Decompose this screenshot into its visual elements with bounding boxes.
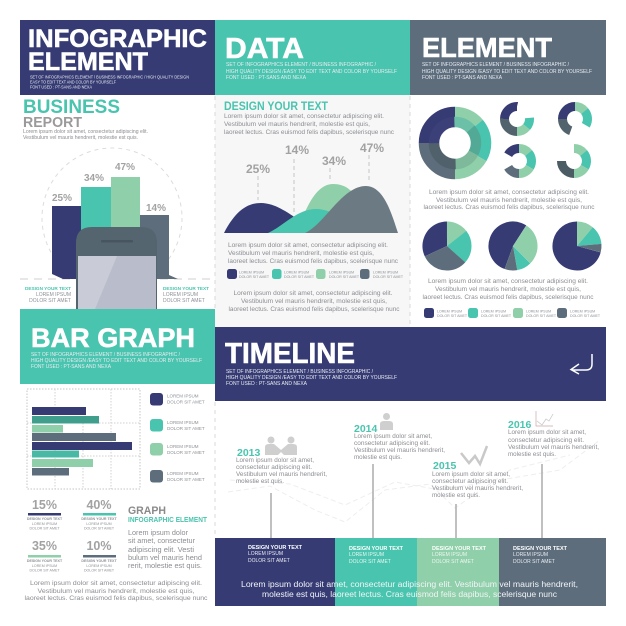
timeline bottom band: DESIGN YOUR TEXT xyxy=(432,546,487,552)
timeline 2016: consectetur adipiscing elit. xyxy=(508,437,584,444)
data text block xyxy=(228,242,399,265)
header: element: HIGH QUALITY DESIGN /EASY TO EDIT TEXT AND COLOR BY YOURSELF xyxy=(422,69,592,75)
data legend: LOREM IPSUM xyxy=(239,270,264,274)
percentage stats: DOLOR SIT AMET xyxy=(29,526,60,530)
timeline bottom band: DOLOR SIT AMET xyxy=(349,559,391,565)
bar graph closing text: Vestibulum vel mauris hendrerit, molestie est quis, xyxy=(38,588,195,595)
dashed panel dividers xyxy=(215,96,410,538)
icon: person xyxy=(380,413,393,430)
icon: smartphone xyxy=(76,227,157,309)
timeline 2013: consectetur adipiscing elit. xyxy=(236,464,312,471)
small donut 4 xyxy=(556,143,592,179)
bar graph closing text xyxy=(24,580,208,602)
large donut chart xyxy=(411,99,499,187)
timeline 2013: Lorem ipsum dolor sit amet, xyxy=(236,457,314,464)
timeline bottom band: DOLOR SIT AMET xyxy=(513,559,555,565)
header: timeline: TIMELINE xyxy=(225,338,355,370)
timeline 2015: consectetur adipiscing elit. xyxy=(432,478,508,485)
element legend: LOREM IPSUM xyxy=(437,310,462,314)
element legend xyxy=(424,308,601,318)
timeline 2016 xyxy=(508,411,599,458)
timeline connectors xyxy=(271,464,542,538)
left phone caption: DESIGN YOUR TEXT xyxy=(25,286,71,291)
area chart: 14% xyxy=(285,143,309,157)
data closing text xyxy=(228,290,400,313)
timeline 2013: 2013 xyxy=(237,447,261,459)
phone bar chart: 14% xyxy=(146,203,166,214)
percentage stats: 35% xyxy=(32,539,57,553)
percentage stats: 40% xyxy=(86,498,112,512)
header: element: ELEMENT xyxy=(422,32,552,63)
header: element: FONT USED : PT-SANS AND NEXA xyxy=(422,75,503,81)
percentage stats: DOLOR SIT AMET xyxy=(84,526,115,530)
element legend: DOLOR SIT AMET xyxy=(481,314,512,318)
right phone caption: DESIGN YOUR TEXT xyxy=(163,286,209,291)
element text block 2: Lorem ipsum dolor sit amet, consectetur adipiscing elit. xyxy=(428,278,588,285)
small donut 1 xyxy=(499,101,535,137)
timeline bottom band: DOLOR SIT AMET xyxy=(432,559,474,565)
data legend xyxy=(227,269,404,279)
element text block 2: laoreet lectus. Cras euismod felis dapibus, scelerisque nunc xyxy=(422,294,594,301)
element legend: LOREM IPSUM xyxy=(570,310,595,314)
pie chart 3 xyxy=(560,229,594,263)
element text block 1: Vestibulum vel mauris hendrerit, molestie est quis, xyxy=(436,197,582,204)
data text block: laoreet lectus. Cras euismod felis dapibus, scelerisque nunc xyxy=(228,258,399,265)
business report heading: Lorem ipsum dolor sit amet, consectetur adipiscing elit. xyxy=(23,129,148,135)
pie chart 2 xyxy=(496,229,530,263)
left phone caption xyxy=(25,286,71,304)
timeline 2014: molestie est quis. xyxy=(354,454,402,461)
header: timeline: HIGH QUALITY DESIGN /EASY TO EDIT TEXT AND COLOR BY YOURSELF xyxy=(226,375,397,381)
bar chart legend: LOREM IPSUM xyxy=(167,420,199,425)
element legend: DOLOR SIT AMET xyxy=(570,314,601,318)
header: data: FONT USED : PT-SANS AND NEXA xyxy=(226,75,307,81)
percentage stats: LOREM IPSUM xyxy=(86,564,112,568)
timeline bottom band: LOREM IPSUM xyxy=(349,552,384,558)
bar graph closing text: laoreet lectus. Cras euismod felis dapibus, scelerisque nunc xyxy=(24,595,208,602)
percentage stats: DESIGN YOUR TEXT xyxy=(27,517,63,521)
data legend: LOREM IPSUM xyxy=(284,270,309,274)
header: data: DATA xyxy=(225,33,304,65)
icon: line chart xyxy=(536,411,553,426)
business report heading: Vestibulum vel mauris hendrerit, molestie est quis. xyxy=(23,135,138,141)
right phone caption: DOLOR SIT AMET xyxy=(163,298,205,304)
header: bar graph: HIGH QUALITY DESIGN /EASY TO EDIT TEXT AND COLOR BY YOURSELF xyxy=(31,358,202,364)
percentage stats xyxy=(27,498,117,572)
bar chart legend: LOREM IPSUM xyxy=(167,394,199,398)
bar chart legend: DOLOR SIT AMET xyxy=(167,426,205,431)
timeline bottom band: DESIGN YOUR TEXT xyxy=(513,546,568,552)
percentage stats: LOREM IPSUM xyxy=(32,522,57,526)
timeline 2013: molestie est quis. xyxy=(236,478,284,485)
graph text block: INFOGRAPHIC ELEMENT xyxy=(128,515,207,524)
header: timeline: SET OF INFOGRAPHICS ELEMENT / BUSINESS INFOGRAPHIC / xyxy=(226,369,374,375)
timeline bottom band: LOREM IPSUM xyxy=(248,551,283,557)
header: infographic element: EASY TO EDIT TEXT AND COLOR BY YOURSELF xyxy=(30,80,116,84)
element text block 2: Vestibulum vel mauris hendrerit, molestie est quis, xyxy=(435,286,581,293)
header: element: SET OF INFOGRAPHICS ELEMENT / BUSINESS INFOGRAPHIC / xyxy=(422,62,570,68)
timeline 2014: Lorem ipsum dolor sit amet, xyxy=(354,433,432,440)
percentage stats: DOLOR SIT AMET xyxy=(29,568,60,572)
icon: handshake xyxy=(265,436,297,455)
graph text block: rerit, molestie est quis. xyxy=(128,563,202,570)
data legend: DOLOR SIT AMET xyxy=(329,275,360,279)
graph text block: bulum vel mauris hend xyxy=(128,555,202,562)
timeline bottom band: DOLOR SIT AMET xyxy=(248,558,290,564)
graph text block: adipiscing elit. Vesti xyxy=(128,547,194,554)
header: infographic element: ELEMENT xyxy=(28,48,148,76)
timeline 2015: molestie est quis. xyxy=(432,492,480,499)
bar chart legend: DOLOR SIT AMET xyxy=(167,477,205,482)
graph text block xyxy=(128,505,207,570)
phone bar chart: 47% xyxy=(115,162,135,173)
graph text block: Lorem ipsum dolor xyxy=(128,530,189,537)
element text block 1: Lorem ipsum dolor sit amet, consectetur adipiscing elit. xyxy=(429,189,589,196)
data heading and text xyxy=(224,101,395,136)
header: infographic element xyxy=(20,20,215,95)
header: data: HIGH QUALITY DESIGN /EASY TO EDIT TEXT AND COLOR BY YOURSELF xyxy=(226,69,397,75)
small donut 2 xyxy=(557,101,593,137)
header: infographic element: FONT USED : PT-SANS AND NEXA xyxy=(30,84,92,90)
data legend: DOLOR SIT AMET xyxy=(239,275,270,279)
timeline bottom band: DESIGN YOUR TEXT xyxy=(248,545,303,551)
timeline bottom band: LOREM IPSUM xyxy=(432,552,467,558)
timeline 2015: Lorem ipsum dolor sit amet, xyxy=(432,471,510,478)
bar chart legend: LOREM IPSUM xyxy=(167,471,199,476)
header: bar graph: BAR GRAPH xyxy=(31,323,195,353)
timeline 2016: Lorem ipsum dolor sit amet, xyxy=(508,429,586,436)
timeline 2014: Vestibulum vel mauris hendrerit, xyxy=(354,447,445,454)
data heading and text: Vestibulum vel mauris hendrerit, molestie est quis, xyxy=(224,121,370,128)
timeline 2014 xyxy=(354,413,445,461)
graph text block: sit amet, consectetur xyxy=(128,538,196,545)
timeline bottom band: molestie est quis, laoreet lectus. Cras euismod felis dapibus, scelerisque nunc xyxy=(262,590,557,599)
data heading and text: laoreet lectus. Cras euismod felis dapibus, scelerisque nunc xyxy=(224,129,395,136)
icon: return arrow xyxy=(571,354,592,374)
bar graph closing text: Lorem ipsum dolor sit amet, consectetur adipiscing elit. xyxy=(30,580,202,587)
right phone caption: LOREM IPSUM xyxy=(163,292,198,298)
percentage stats: DESIGN YOUR TEXT xyxy=(81,517,117,521)
left phone caption: LOREM IPSUM xyxy=(36,292,71,298)
phone bar chart: 25% xyxy=(52,193,72,204)
business report heading: BUSINESS xyxy=(23,96,120,118)
header: timeline: FONT USED : PT-SANS AND NEXA xyxy=(226,381,308,387)
business report heading: REPORT xyxy=(23,115,82,131)
header: data: SET OF INFOGRAPHICS ELEMENT / BUSINESS INFOGRAPHIC / xyxy=(226,62,377,68)
element legend: DOLOR SIT AMET xyxy=(526,314,557,318)
header: timeline xyxy=(215,327,606,401)
graph text block: GRAPH xyxy=(128,505,166,517)
timeline 2015: Vestibulum vel mauris hendrerit, xyxy=(432,485,523,492)
percentage stats: DOLOR SIT AMET xyxy=(84,568,115,572)
header: infographic element: INFOGRAPHIC xyxy=(28,25,207,53)
area chart: 47% xyxy=(360,141,384,155)
data closing text: Vestibulum vel mauris hendrerit, molestie est quis, xyxy=(241,298,387,305)
data text block: Lorem ipsum dolor sit amet, consectetur adipiscing elit. xyxy=(228,242,388,249)
timeline bottom band xyxy=(215,538,606,606)
timeline 2013 xyxy=(236,436,327,485)
element legend: LOREM IPSUM xyxy=(526,310,551,314)
percentage stats: 15% xyxy=(32,498,57,512)
timeline bottom band: LOREM IPSUM xyxy=(513,552,548,558)
business report heading xyxy=(23,96,148,141)
element text block 1 xyxy=(424,189,595,211)
data legend: DOLOR SIT AMET xyxy=(284,275,315,279)
header: element xyxy=(410,20,606,95)
phone bar chart: 34% xyxy=(84,173,104,184)
timeline bottom band: DESIGN YOUR TEXT xyxy=(349,546,404,552)
faint timeline background lines xyxy=(228,440,600,522)
data text block: Vestibulum vel mauris hendrerit, molestie est quis, xyxy=(228,250,374,257)
timeline 2015 xyxy=(432,446,523,499)
data closing text: laoreet lectus. Cras euismod felis dapibus, scelerisque nunc xyxy=(228,306,400,313)
percentage stats: DESIGN YOUR TEXT xyxy=(81,559,117,563)
data legend: LOREM IPSUM xyxy=(329,270,354,274)
bar chart legend: DOLOR SIT AMET xyxy=(167,400,205,404)
timeline bottom band: Lorem ipsum dolor sit amet, consectetur adipiscing elit. Vestibulum vel mauris hendrerit, xyxy=(241,580,578,589)
element text block 1: laoreet lectus. Cras euismod felis dapibus, scelerisque nunc xyxy=(424,204,595,211)
timeline 2014: 2014 xyxy=(354,423,378,435)
element legend: DOLOR SIT AMET xyxy=(437,314,468,318)
icon: trend line xyxy=(461,446,487,464)
right phone caption xyxy=(163,286,209,304)
percentage stats: 10% xyxy=(86,539,112,553)
timeline 2016: molestie est quis. xyxy=(508,451,556,458)
header: bar graph: SET OF INFOGRAPHICS ELEMENT / BUSINESS INFOGRAPHIC / xyxy=(31,352,181,358)
bar chart xyxy=(27,389,140,489)
area chart: 25% xyxy=(246,162,270,176)
pie chart 1 xyxy=(430,229,464,263)
bar chart legend xyxy=(150,393,205,482)
small donut 3 xyxy=(501,143,537,179)
data closing text: Lorem ipsum dolor sit amet, consectetur adipiscing elit. xyxy=(234,290,393,297)
percentage stats: LOREM IPSUM xyxy=(32,564,57,568)
header: bar graph: FONT USED : PT-SANS AND NEXA xyxy=(31,364,112,370)
header: bar graph xyxy=(20,309,215,384)
left phone caption: DOLOR SIT AMET xyxy=(29,298,71,304)
data heading and text: DESIGN YOUR TEXT xyxy=(224,101,328,113)
area chart: 34% xyxy=(322,154,346,168)
element text block 2 xyxy=(422,278,594,301)
data panel background xyxy=(215,95,410,327)
timeline 2016: 2016 xyxy=(508,419,532,431)
timeline 2015: 2015 xyxy=(433,460,457,472)
header: infographic element: SET OF INFOGRAPHICS ELEMENT / BUSINESS INFOGRAPHIC / HIGH QUALITY DESIGN xyxy=(30,74,189,80)
data legend: LOREM IPSUM xyxy=(373,270,398,274)
timeline 2013: Vestibulum vel mauris hendrerit, xyxy=(236,471,327,478)
header: data xyxy=(215,20,410,95)
element legend: LOREM IPSUM xyxy=(481,310,506,314)
timeline 2016: Vestibulum vel mauris hendrerit, xyxy=(508,444,599,451)
phone bar chart xyxy=(20,148,210,309)
area chart xyxy=(224,141,398,233)
percentage stats: LOREM IPSUM xyxy=(86,522,112,526)
timeline 2014: consectetur adipiscing elit. xyxy=(354,440,430,447)
bar chart legend: LOREM IPSUM xyxy=(167,444,199,449)
bar chart legend: DOLOR SIT AMET xyxy=(167,450,205,455)
data legend: DOLOR SIT AMET xyxy=(373,275,404,279)
data heading and text: Lorem ipsum dolor sit amet, consectetur adipiscing elit. xyxy=(224,113,384,120)
percentage stats: DESIGN YOUR TEXT xyxy=(27,559,63,563)
